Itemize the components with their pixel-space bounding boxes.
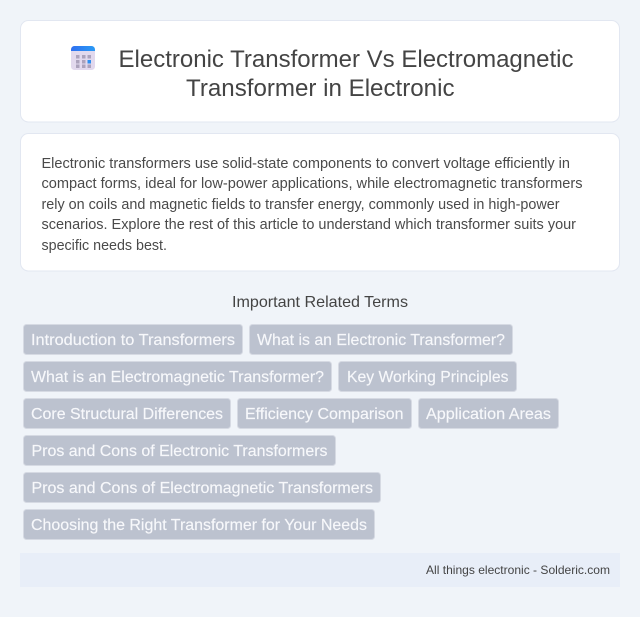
panel: introduction text (20, 134, 620, 271)
title: Electronic Transformer Vs Electromagnetic (118, 46, 574, 73)
icon: calendar grid (71, 46, 95, 70)
footer: All things electronic - Solderic.com (426, 563, 610, 577)
tag: pros cons electronic (24, 436, 336, 466)
tag: application areas: Application Areas (426, 406, 551, 423)
tag: pros cons electronic: Pros and Cons of Electronic Transformers (32, 443, 328, 460)
tag: choosing (24, 510, 374, 540)
heading: important related terms: Important Related Terms (232, 294, 408, 311)
panel: introduction text: specific needs best. (42, 238, 167, 254)
tag: electromagnetic transformer (24, 362, 332, 392)
tag: efficiency: Efficiency Comparison (245, 406, 404, 423)
tag: pros cons electromagnetic (24, 472, 380, 502)
tag: introduction: Introduction to Transformers (31, 332, 235, 349)
tag: electronic transformer (250, 324, 512, 354)
tag: working principles: Key Working Principles (347, 369, 508, 386)
tag: working principles (338, 362, 516, 392)
panel: introduction text: rely on coils and magnetic fields to transfer energy, commonly used in high-power (42, 197, 560, 213)
tag: electronic transformer: What is an Electronic Transformer? (257, 332, 505, 349)
tag: electromagnetic transformer: What is an Electromagnetic Transformer? (31, 369, 324, 386)
tag: application areas (418, 398, 558, 428)
panel: introduction text: compact forms, ideal for low-power applications, while electromagnetic transformers (42, 176, 582, 192)
panel: introduction text: Electronic transformers use solid-state components to convert voltage efficiently in (42, 156, 570, 172)
panel: introduction text: scenarios. Explore the rest of this article to understand which transformer suits your (42, 217, 576, 233)
title: Transformer in Electronic (186, 75, 454, 102)
tag: pros cons electromagnetic: Pros and Cons of Electromagnetic Transformers (32, 480, 373, 497)
tag: efficiency (238, 398, 412, 428)
panel: related term tags (24, 324, 558, 540)
panel: title header (20, 20, 620, 122)
tag: introduction (24, 324, 242, 354)
tag: structural differences: Core Structural Differences (31, 406, 223, 423)
tag: choosing: Choosing the Right Transformer for Your Needs (31, 517, 367, 534)
tag: structural differences (24, 398, 230, 428)
title (118, 46, 574, 102)
footer (20, 553, 620, 587)
